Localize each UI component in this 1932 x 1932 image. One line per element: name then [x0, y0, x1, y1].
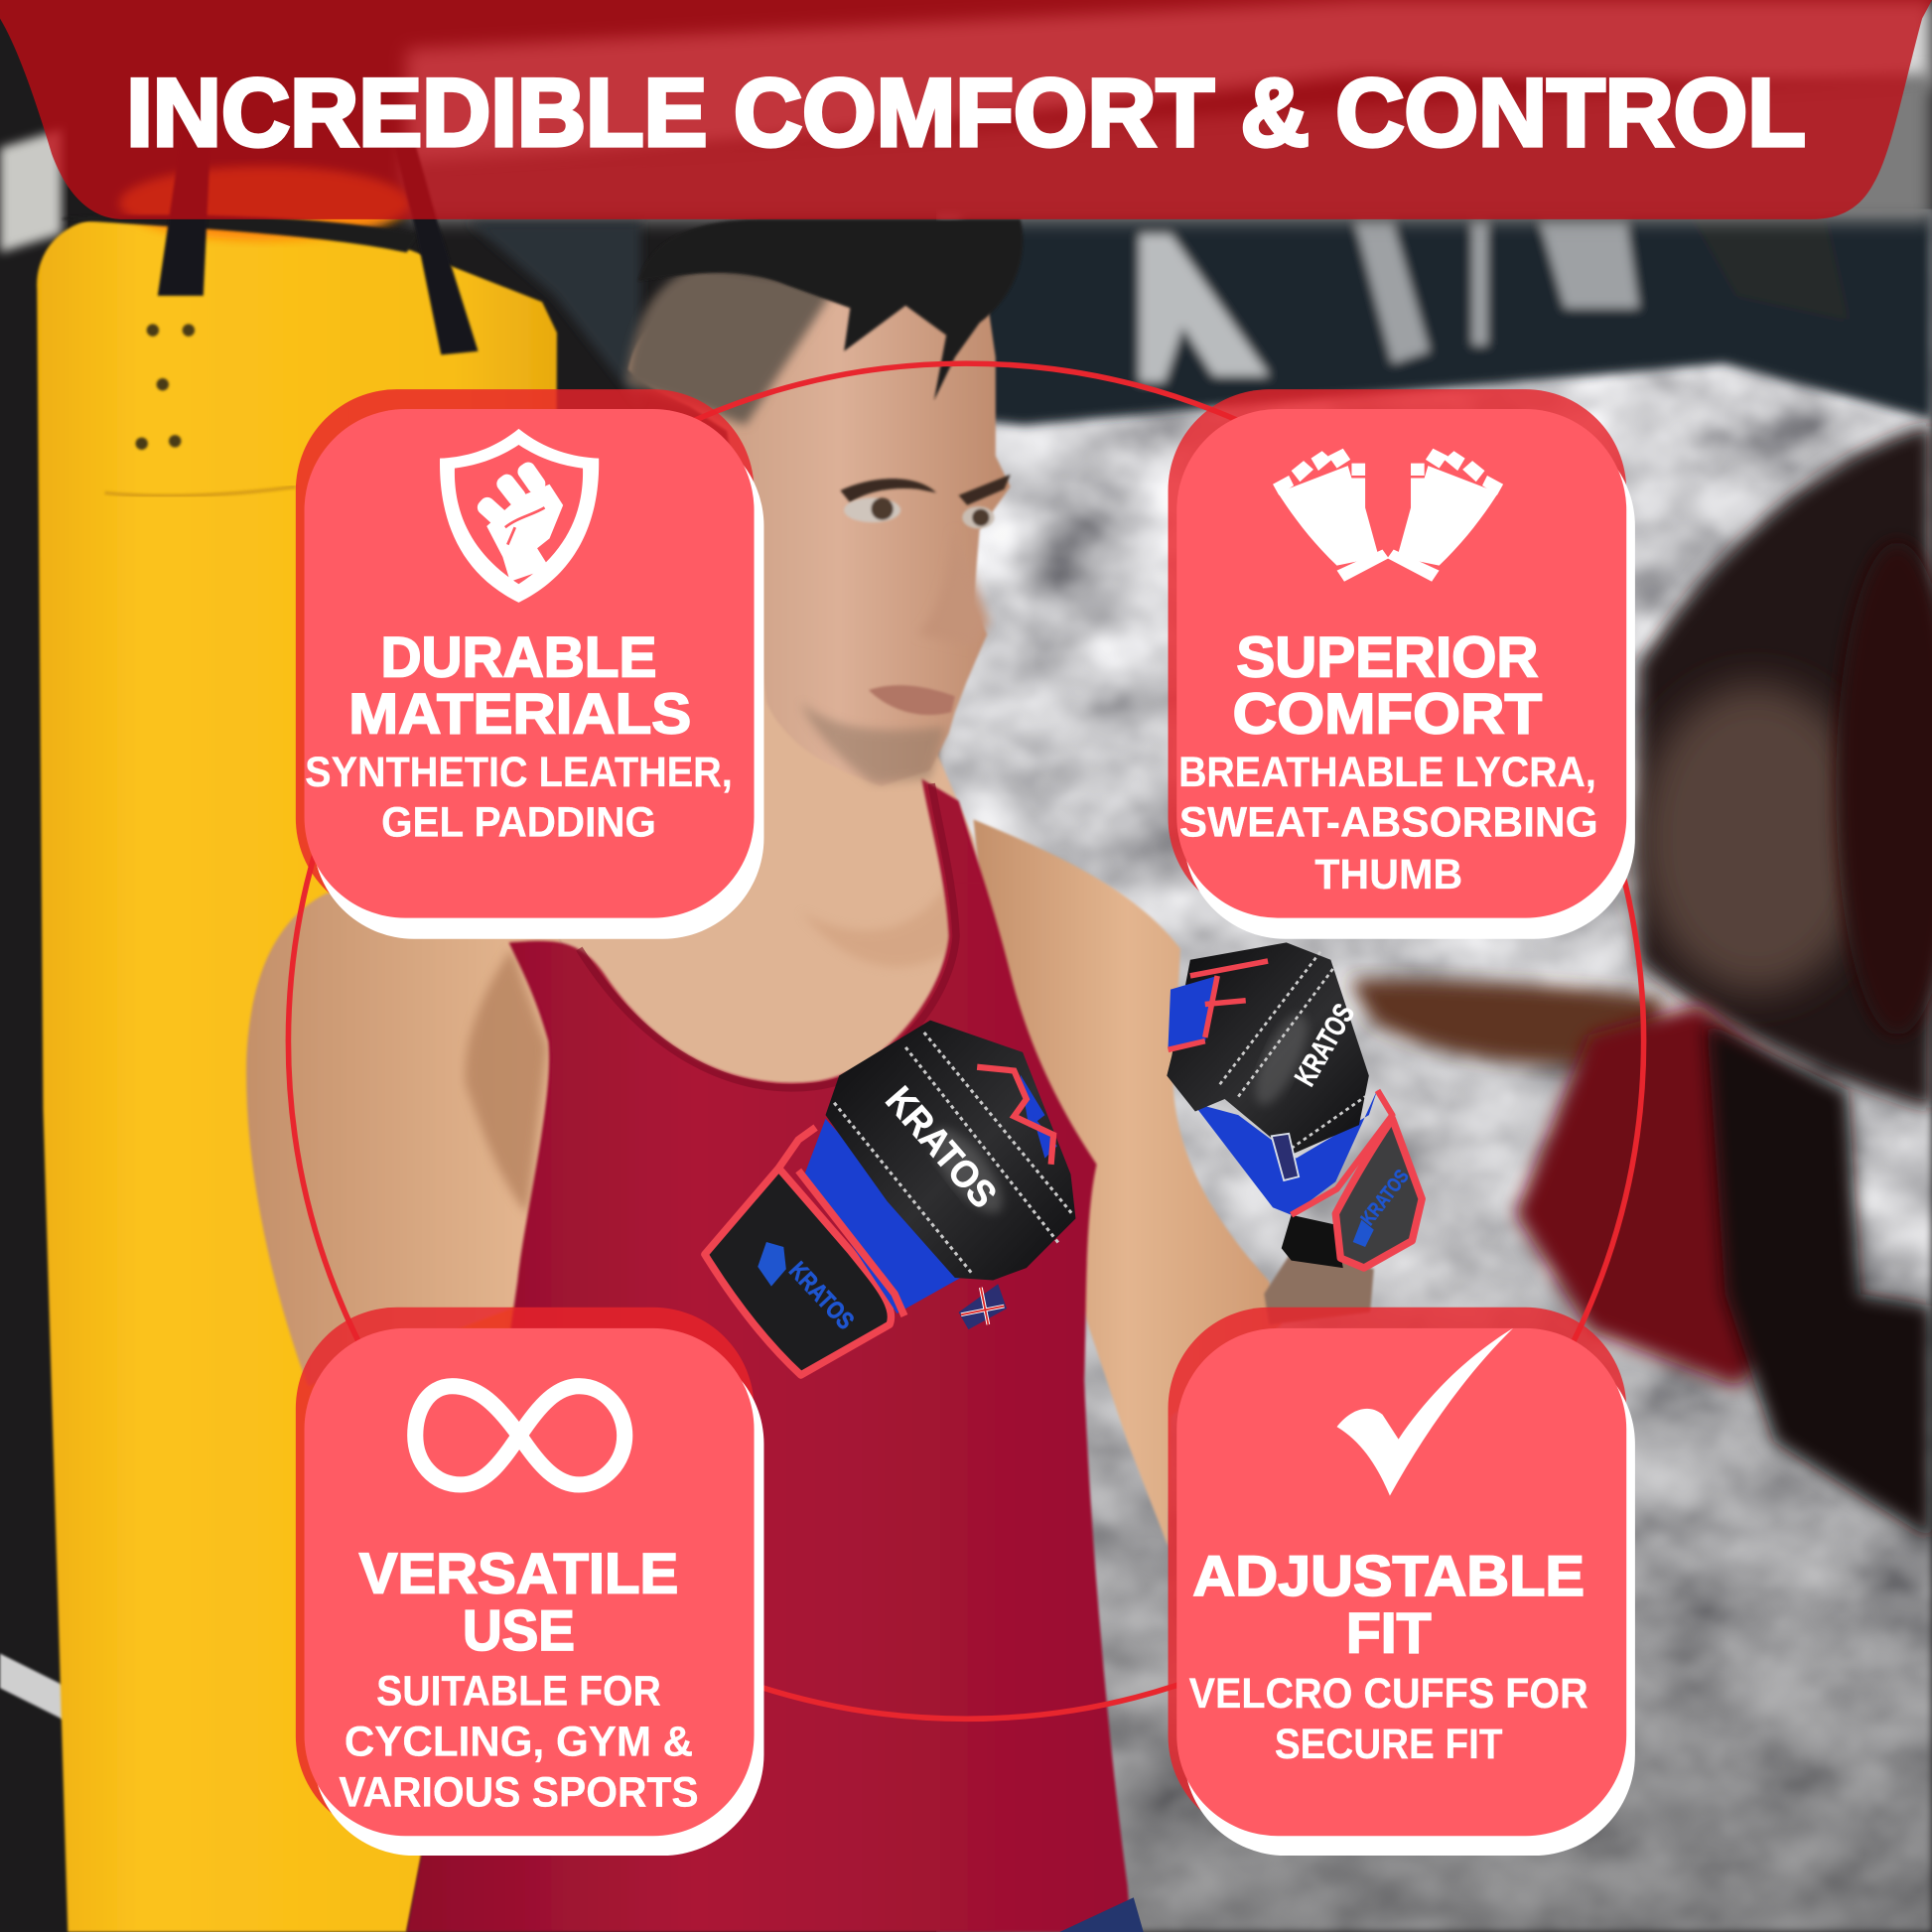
icon: infinity	[415, 1386, 624, 1484]
heading: FIT	[1346, 1601, 1432, 1665]
wrist below glove	[665, 1257, 813, 1430]
description: BREATHABLE LYCRA,	[1178, 749, 1596, 795]
heading	[1233, 625, 1542, 746]
description: VARIOUS SPORTS	[339, 1768, 699, 1815]
red tank top	[407, 778, 1131, 1932]
description: VELCRO CUFFS FOR	[1189, 1670, 1588, 1717]
header banner	[0, 0, 1932, 219]
title: INCREDIBLE COMFORT & CONTROL	[126, 58, 1806, 166]
red ring connecting the panels	[288, 363, 1644, 1719]
far glove	[1167, 942, 1422, 1268]
grey mottled graffiti wall	[936, 209, 1932, 1932]
blue cuff text: KRATOS	[1357, 1166, 1414, 1230]
description: SUITABLE FOR	[376, 1668, 661, 1715]
description: GEL PADDING	[381, 799, 656, 846]
description: THUMB	[1314, 851, 1462, 897]
bear logo	[758, 1242, 786, 1287]
right glove	[1387, 449, 1503, 582]
lower-left light band	[0, 1654, 65, 1721]
black leather fist	[826, 1021, 1075, 1280]
KRATOS logo on glove: KRATOS	[877, 1079, 1005, 1216]
orange bag top	[119, 167, 410, 240]
description	[1178, 749, 1598, 897]
fist	[475, 460, 563, 582]
black lower cuff	[1282, 1215, 1343, 1268]
description: SWEAT-ABSORBING	[1179, 799, 1598, 846]
gloss highlight	[920, 1118, 1015, 1223]
panel: adjustable fit	[1169, 1308, 1635, 1856]
heading	[348, 625, 691, 746]
description	[1189, 1670, 1588, 1767]
heading: ADJUSTABLE	[1192, 1545, 1585, 1608]
description: SECURE FIT	[1275, 1721, 1503, 1767]
icon: check mark	[1337, 1328, 1513, 1496]
KRATOS logo: KRATOS	[1289, 999, 1361, 1092]
mouth and stubble	[869, 685, 955, 715]
panel: versatile use	[296, 1308, 763, 1856]
description	[305, 749, 733, 846]
panel: superior comfort	[1169, 389, 1635, 939]
eye	[844, 497, 995, 528]
dark graffiti lettering along top of wall	[961, 209, 1932, 425]
finger trim	[977, 1067, 1053, 1165]
left arm and shoulder	[246, 863, 801, 1436]
heading: USE	[463, 1599, 575, 1663]
black leather back	[1167, 942, 1369, 1155]
eyebrow	[840, 479, 936, 502]
heading	[359, 1543, 678, 1663]
head and face	[628, 289, 1011, 786]
neck and chest	[542, 592, 998, 1121]
blue shorts at bottom	[1059, 1897, 1144, 1932]
blurred boxer silhouette	[1349, 425, 1932, 1540]
description	[339, 1668, 699, 1815]
tank neckline trim	[579, 783, 956, 1088]
armpit shadow	[466, 949, 547, 1213]
nose and cheek shade	[918, 530, 990, 647]
left glove	[1273, 449, 1389, 582]
heading: VERSATILE	[359, 1543, 678, 1606]
heading	[1192, 1545, 1585, 1665]
blue fingers	[1169, 976, 1217, 1047]
photo of athlete wearing gloves	[246, 219, 1422, 1932]
blue between fingers	[1021, 1074, 1044, 1128]
panel: durable materials	[296, 389, 763, 939]
grey cuff	[1335, 1119, 1422, 1268]
black bag straps	[158, 111, 211, 296]
far arm and shoulder	[973, 819, 1282, 1547]
blue wrist band	[804, 1119, 967, 1313]
cuff strap	[705, 1169, 892, 1375]
blue wrist band	[1192, 1089, 1378, 1215]
description: CYCLING, GYM &	[345, 1719, 693, 1765]
upper-left grey beam	[0, 129, 62, 252]
icon: shield with fist	[440, 429, 599, 603]
icon: fingerless gloves	[1273, 449, 1503, 582]
yellow punching bag	[37, 111, 557, 1932]
bag eyelets	[136, 324, 195, 450]
finger trim	[1169, 961, 1268, 1049]
union flag tag	[959, 1284, 1007, 1329]
translucent red header shape	[0, 0, 1932, 219]
hair	[638, 219, 1023, 400]
stitching	[1220, 951, 1365, 1149]
center glove	[705, 1021, 1075, 1375]
shaved side of head	[625, 265, 838, 425]
flag tag	[1272, 1134, 1299, 1180]
white stitching	[834, 1033, 1072, 1276]
heading: MATERIALS	[348, 682, 691, 746]
description: SYNTHETIC LEATHER,	[305, 749, 733, 795]
blue cuff logo text: KRATOS	[783, 1257, 859, 1335]
heading: DURABLE	[380, 625, 656, 689]
heading: COMFORT	[1233, 682, 1542, 746]
heading: SUPERIOR	[1236, 625, 1538, 689]
grey rods behind header	[407, 0, 1932, 185]
